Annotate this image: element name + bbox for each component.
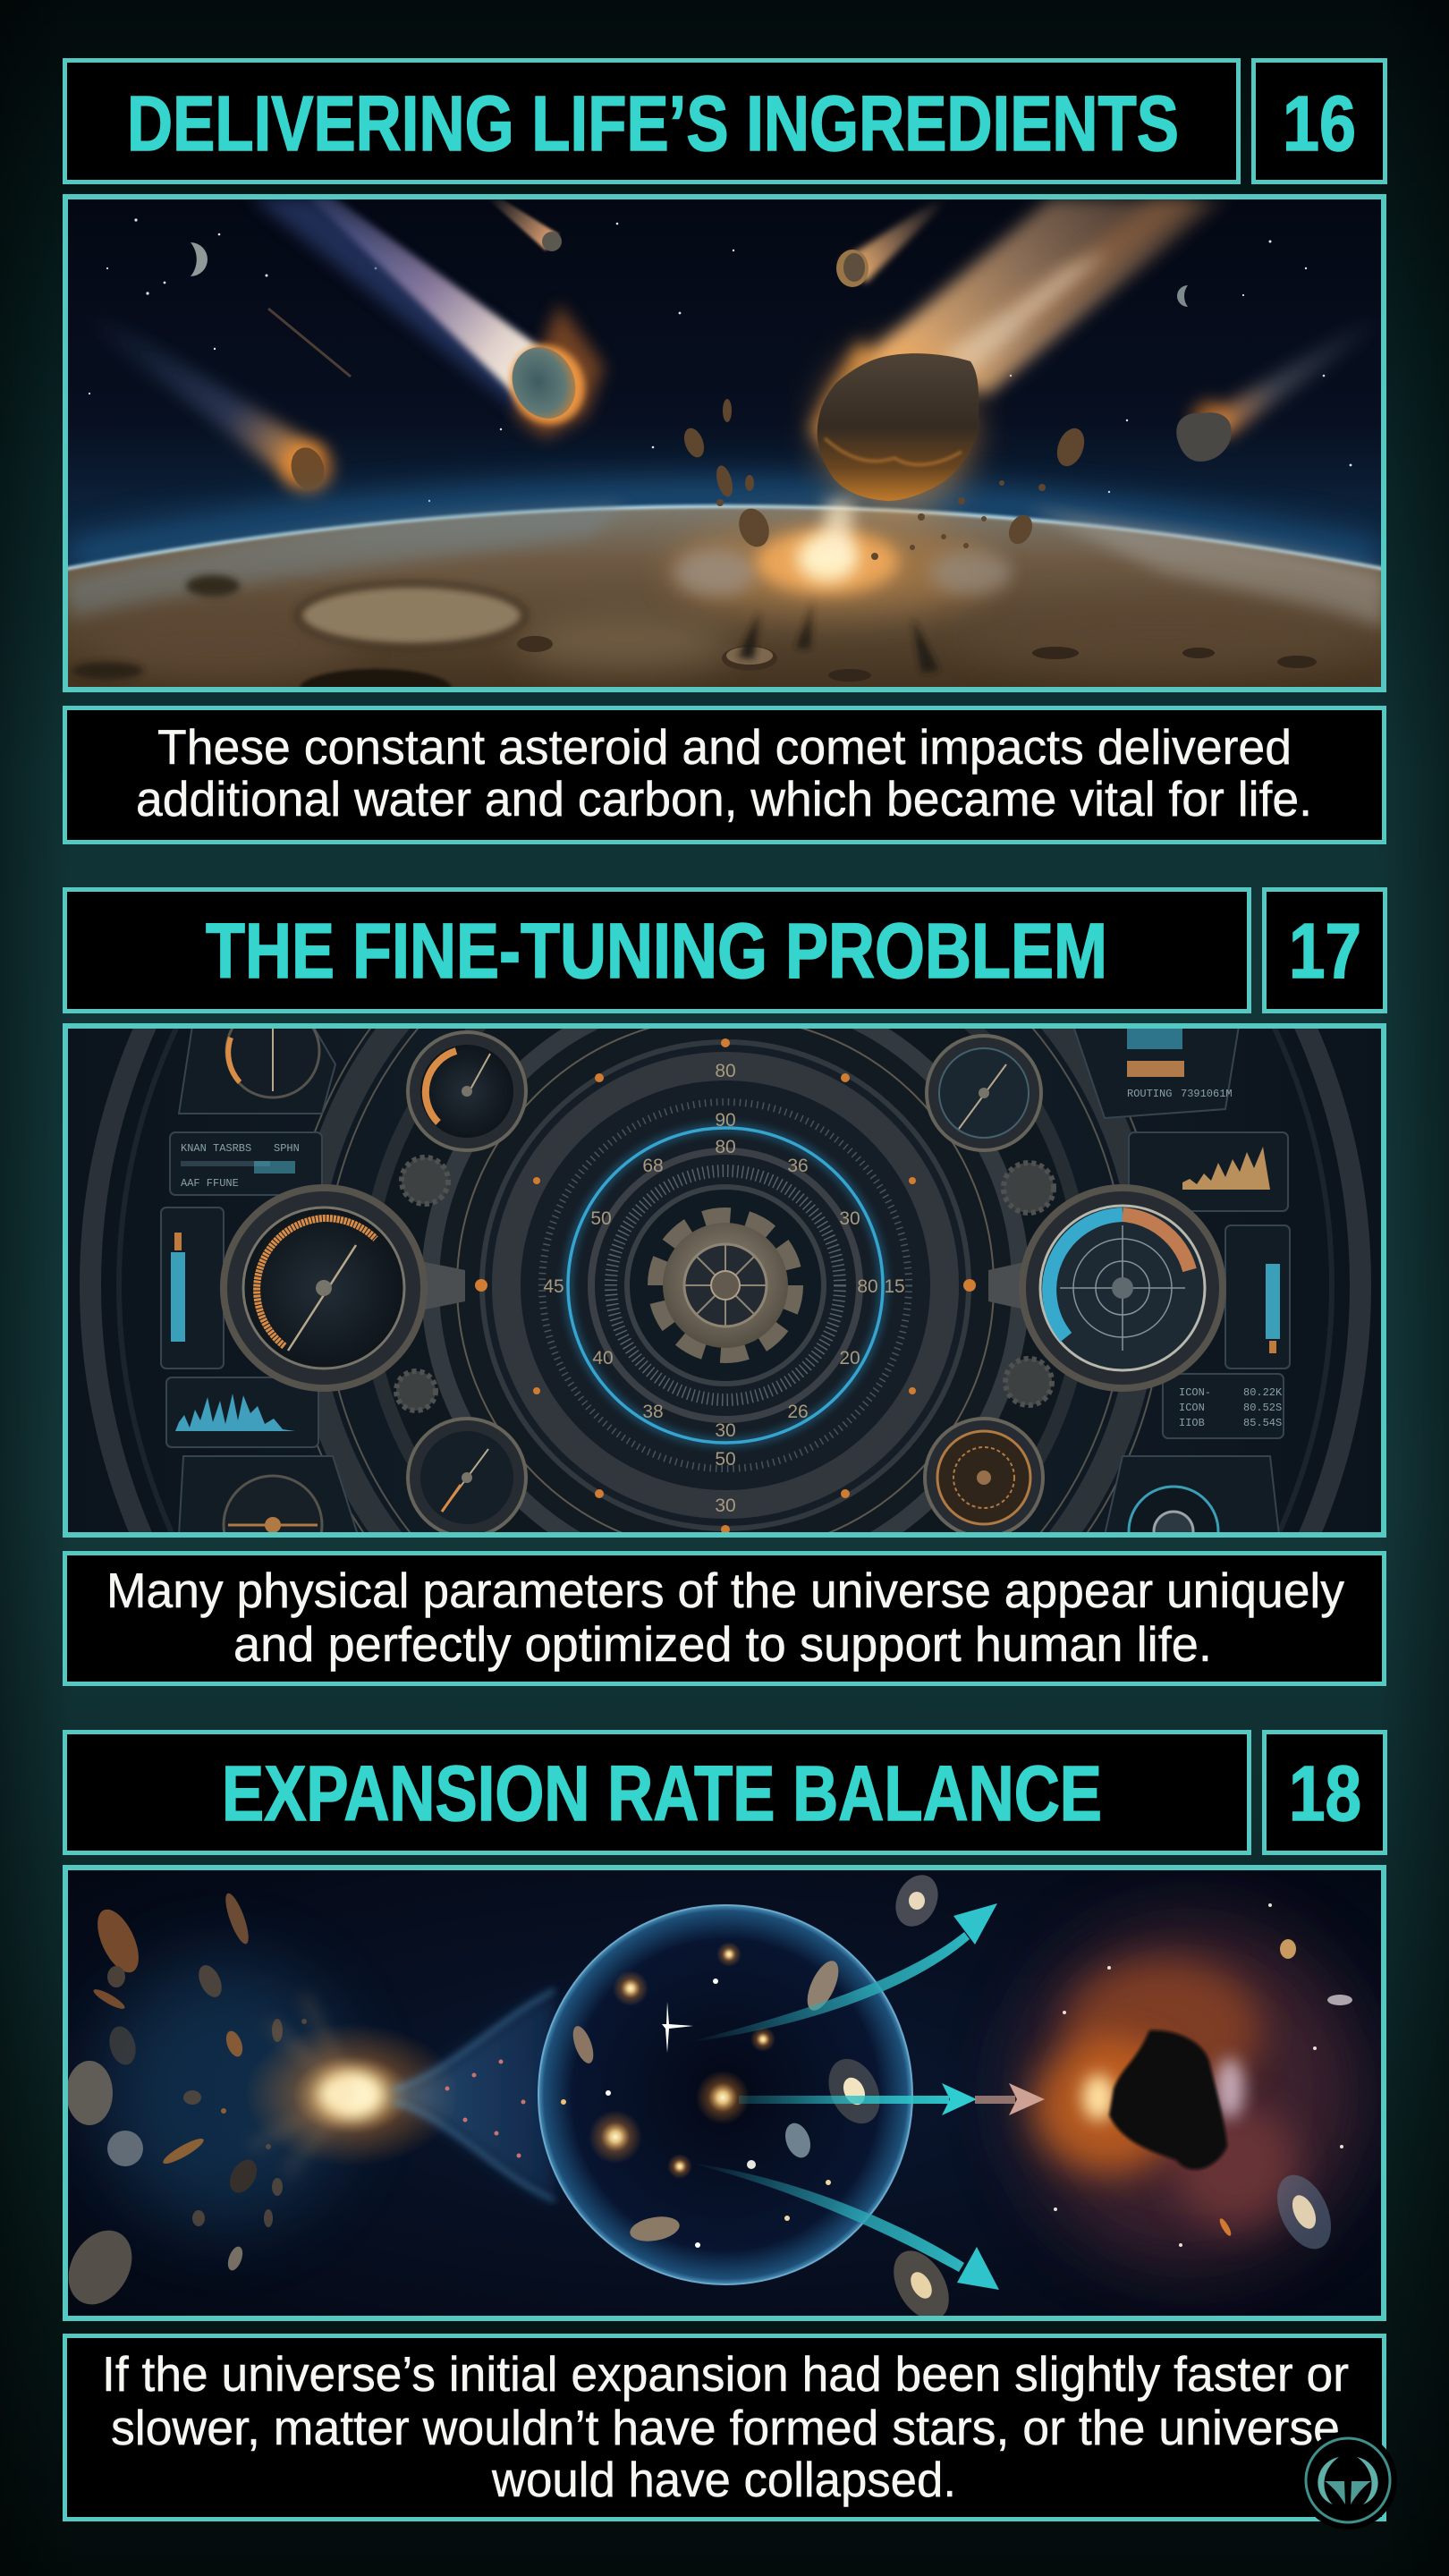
right level bar: [1266, 1264, 1280, 1353]
big bang blue haze: [98, 1959, 349, 2227]
moon left: [191, 242, 208, 276]
right data table: ICON: [1179, 1402, 1205, 1414]
connector arms: [420, 1261, 1029, 1310]
title box 16: [64, 61, 1238, 182]
partial dial top left: [226, 1004, 319, 1097]
scale numbers: 80: [857, 1276, 878, 1297]
illustration frame 18: [65, 1868, 1384, 2318]
left panel readout: [181, 1142, 300, 1190]
orange ring markers: [475, 1038, 976, 1534]
far galaxies: [882, 1868, 1352, 2329]
glass sphere universe: [538, 1905, 912, 2284]
illustration frame 16: [65, 197, 1384, 690]
scale numbers: 15: [884, 1276, 905, 1297]
planet surface: [65, 497, 1384, 708]
debris: [681, 399, 1089, 560]
small dial top right: [927, 1036, 1041, 1150]
big bang flash: [244, 1995, 459, 2174]
right blue gauge: [1022, 1188, 1223, 1388]
right data table: 80.52S: [1243, 1402, 1282, 1414]
scale numbers: 80: [715, 1137, 736, 1157]
small cogs: [396, 1157, 1054, 1411]
arrow down: [689, 2163, 999, 2290]
comet lower left: [111, 329, 343, 503]
side panels: [161, 1026, 1290, 1535]
central gear: [656, 1216, 795, 1355]
caption 17: and perfectly optimized to support human life.: [233, 1616, 1212, 1672]
caption 18: If the universe’s initial expansion had been slightly faster or: [102, 2346, 1349, 2402]
number badge 17: [1265, 889, 1385, 1011]
partial dial bottom right: [1129, 1487, 1218, 1576]
arrow up: [684, 1903, 997, 2043]
scale numbers: 68: [642, 1156, 664, 1176]
pink arrow toward collapse: [975, 2083, 1045, 2115]
left panel readout: AAF FFUNE: [181, 1177, 239, 1190]
scale numbers: 50: [590, 1208, 612, 1229]
rock debris: [55, 1891, 307, 2316]
small dial bottom left: [408, 1419, 526, 1537]
section 17: the fine-tuning problem: [64, 650, 1385, 1920]
title box 16: DELIVERING LIFE’S INGREDIENTS: [127, 80, 1179, 167]
section 16: delivering life's ingredients: [64, 61, 1385, 843]
number badge 16: 16: [1283, 80, 1356, 167]
craters and terrain: [72, 575, 1360, 708]
central concentric dial: [430, 990, 1021, 1580]
scale numbers: 40: [592, 1348, 614, 1368]
scale numbers: 26: [787, 1402, 809, 1422]
left orange gauge: [224, 1188, 424, 1388]
caption 16: These constant asteroid and comet impacts delivered: [157, 719, 1292, 775]
title box 17: [64, 889, 1249, 1011]
number badge 16: [1254, 61, 1385, 182]
arrow middle: [739, 2083, 977, 2115]
top right bars: 7391061M: [1181, 1088, 1233, 1100]
scale numbers: 36: [787, 1156, 809, 1176]
left panel readout: SPHN: [274, 1142, 300, 1155]
right data table: 80.22K: [1243, 1386, 1283, 1399]
number badge 17: 17: [1289, 908, 1361, 995]
scale numbers: 45: [543, 1276, 564, 1297]
expansion funnel: [394, 1990, 555, 2200]
scale numbers: 30: [839, 1208, 860, 1229]
galaxies in sphere: [561, 1942, 890, 2248]
title box 18: EXPANSION RATE BALANCE: [222, 1750, 1102, 1837]
right data table: ICON-: [1179, 1386, 1211, 1399]
caption 16: additional water and carbon, which became vital for life.: [136, 771, 1312, 826]
right data table: IIOB: [1179, 1417, 1205, 1429]
scale numbers: [543, 1061, 905, 1516]
illustration: asteroids striking the early Earth: [65, 197, 1384, 708]
scale numbers: 50: [715, 1449, 736, 1470]
scale numbers: 80: [715, 1061, 736, 1081]
illustration: universe expansion from big bang to collapse: [55, 1868, 1384, 2329]
scale numbers: 90: [715, 1110, 736, 1131]
scale numbers: 20: [839, 1348, 860, 1368]
main asteroid: [818, 347, 979, 512]
small dial bottom right: [925, 1419, 1043, 1537]
top right bars: ROUTING: [1127, 1088, 1172, 1100]
caption 17: [64, 1553, 1385, 1683]
top right bars: [1127, 1026, 1233, 1100]
collapse nebula: [1020, 1903, 1360, 2263]
section 18: expansion rate balance: [55, 1732, 1385, 2519]
title box 17: THE FINE-TUNING PROBLEM: [206, 908, 1107, 995]
illustration: cosmic control panel of dials: [65, 650, 1384, 1920]
right orange chart: [1182, 1147, 1270, 1190]
logo badge: [1299, 2431, 1397, 2529]
scale numbers: 30: [715, 1420, 736, 1441]
moon right: [1177, 285, 1188, 307]
number badge 18: [1265, 1732, 1385, 1853]
right data table: [1179, 1386, 1283, 1429]
stars: [89, 218, 1352, 502]
caption 18: [64, 2336, 1385, 2519]
left waveform chart: [175, 1394, 295, 1431]
caption 18: would have collapsed.: [491, 2452, 956, 2507]
main asteroid tail: [809, 199, 1225, 456]
small dial top left: [408, 1032, 526, 1150]
caption 18: slower, matter wouldn’t have formed stars, or the universe: [111, 2400, 1340, 2455]
caption 17: Many physical parameters of the universe appear uniquely: [106, 1563, 1344, 1618]
scale numbers: 30: [715, 1496, 736, 1516]
right rock: [1176, 333, 1357, 462]
left level bar: [171, 1233, 185, 1342]
number badge 18: 18: [1289, 1750, 1361, 1837]
small comet top: [487, 199, 562, 251]
title box 18: [64, 1732, 1249, 1853]
left panel readout: KNAN TASRBS: [181, 1142, 251, 1155]
right data table: 85.54S: [1243, 1417, 1282, 1429]
partial dial bottom left: [224, 1476, 322, 1574]
illustration frame 17: [65, 1026, 1384, 1535]
comet large left: [250, 197, 604, 438]
distant streak: [268, 309, 351, 377]
caption 16: [64, 708, 1385, 843]
scale numbers: 38: [642, 1402, 664, 1422]
impact explosion: [671, 501, 1012, 614]
small comet upper right: [836, 202, 941, 287]
outer metal rings: [90, 650, 1360, 1920]
